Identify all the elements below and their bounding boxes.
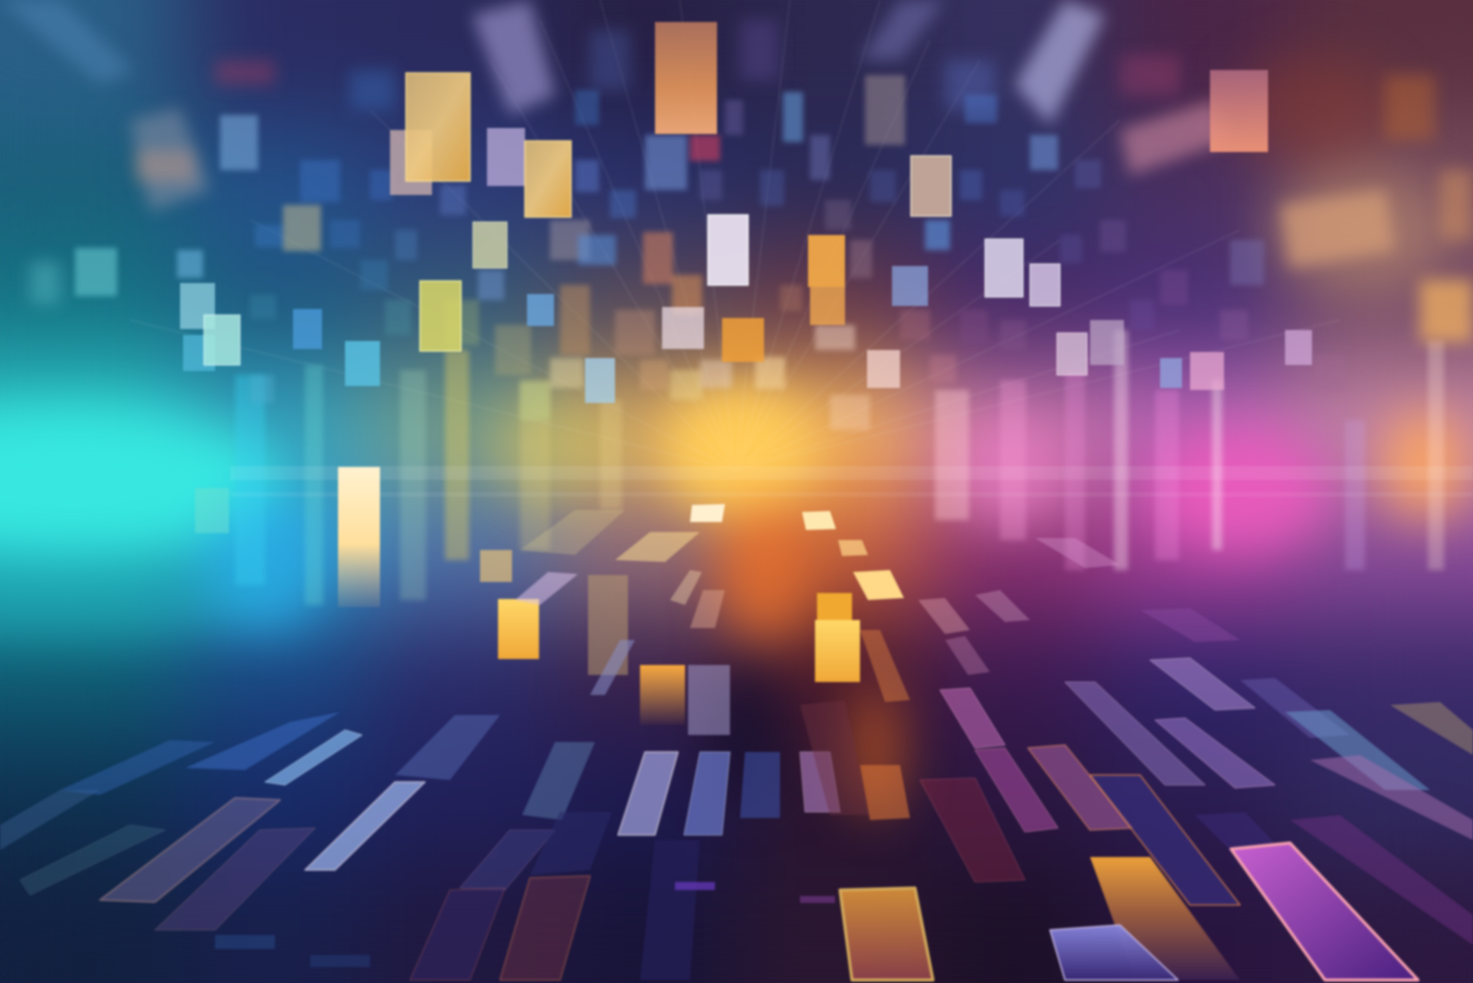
floating tiles: dim mid-depth cluster — [75, 75, 1345, 430]
streaks: radial light rays — [130, 0, 1340, 470]
glow: cyan, yellow, pink and orange light sources — [0, 55, 1470, 815]
blurred tiles: top and edges — [0, 0, 1473, 342]
floor planks: centre — [618, 700, 1025, 980]
floating tiles: sharp foreground — [180, 22, 1312, 403]
floor planks: right side — [940, 538, 1473, 980]
horizon line — [230, 466, 1473, 497]
upright blocks on the floor — [195, 467, 1030, 735]
floor planks: left side — [0, 712, 612, 980]
light columns around the horizon — [235, 330, 1444, 605]
